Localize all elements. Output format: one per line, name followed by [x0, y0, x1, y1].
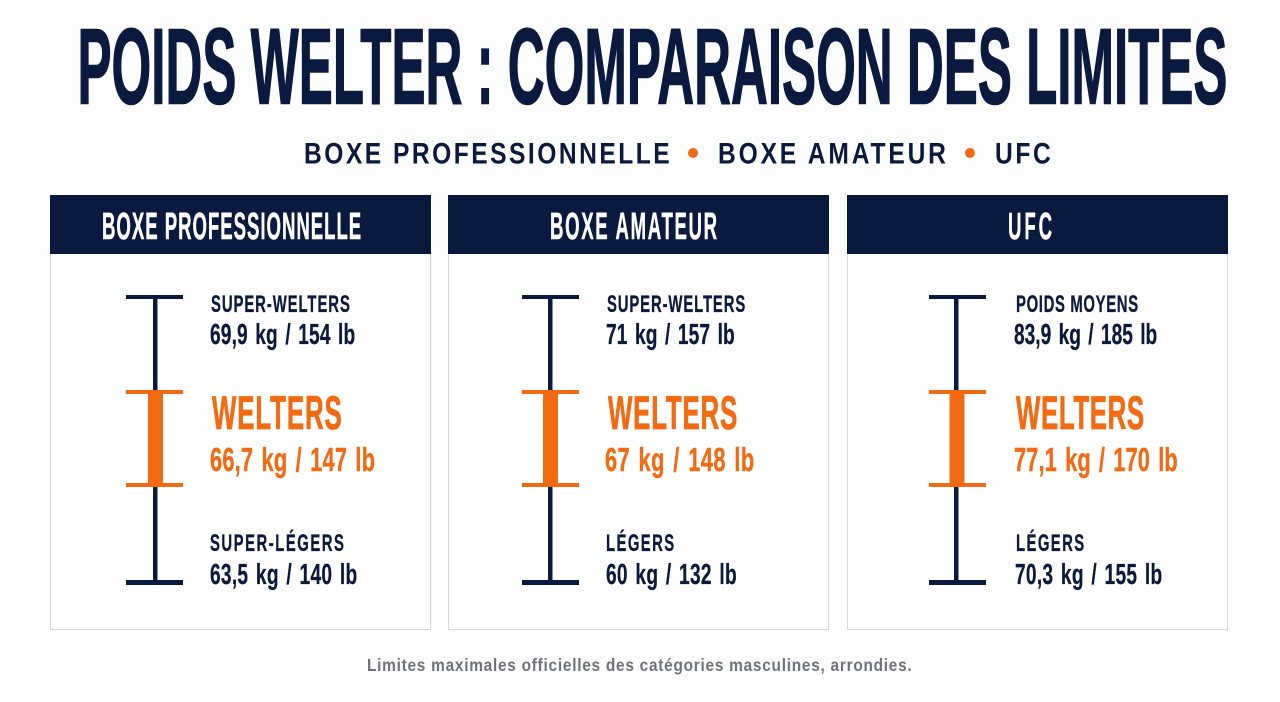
upper category: POIDS MOYENS	[1016, 292, 1138, 318]
panel: ufc	[847, 195, 1228, 630]
weight scale	[126, 295, 183, 585]
lower category: LÉGERS	[606, 529, 674, 557]
lower category	[1015, 529, 1162, 591]
lower category: 70,3 kg / 155 lb	[1015, 559, 1162, 591]
lower category: LÉGERS	[1016, 529, 1084, 557]
subtitle: BOXE AMATEUR	[718, 136, 946, 170]
upper category	[210, 292, 355, 351]
lower category: SUPER-LÉGERS	[210, 529, 344, 557]
panel: boxe professionnelle	[50, 195, 431, 630]
upper category	[606, 292, 745, 351]
upper category	[1014, 292, 1157, 351]
lower category: 60 kg / 132 lb	[606, 559, 737, 591]
panel header: BOXE AMATEUR	[550, 206, 717, 248]
welter category: WELTERS	[212, 388, 342, 440]
panel header	[50, 195, 431, 254]
weight scale	[522, 295, 579, 585]
upper category: SUPER-WELTERS	[607, 292, 745, 318]
welter category	[605, 388, 754, 478]
footnote: Limites maximales officielles des catégories masculines, arrondies.	[367, 656, 912, 675]
weight scale	[929, 295, 986, 585]
welter category: 66,7 kg / 147 lb	[210, 441, 375, 478]
upper category: 71 kg / 157 lb	[606, 319, 735, 351]
panel header	[847, 195, 1228, 254]
panel: boxe amateur	[448, 195, 829, 630]
welter category: 77,1 kg / 170 lb	[1014, 441, 1178, 478]
upper category: SUPER-WELTERS	[211, 292, 350, 318]
panel header: UFC	[1008, 206, 1052, 248]
panel header	[448, 195, 829, 254]
welter category: WELTERS	[608, 388, 737, 440]
lower category	[606, 529, 737, 591]
lower category: 63,5 kg / 140 lb	[210, 559, 357, 591]
subtitle: UFC	[995, 136, 1051, 170]
welter category	[210, 388, 375, 478]
welter category	[1014, 388, 1178, 478]
welter category: WELTERS	[1016, 388, 1144, 440]
subtitle	[304, 136, 1051, 170]
panel header: BOXE PROFESSIONNELLE	[102, 206, 361, 248]
welter category: 67 kg / 148 lb	[605, 441, 754, 478]
subtitle: BOXE PROFESSIONNELLE	[304, 136, 670, 170]
upper category: 83,9 kg / 185 lb	[1014, 319, 1157, 351]
lower category	[210, 529, 357, 591]
upper category: 69,9 kg / 154 lb	[210, 319, 355, 351]
